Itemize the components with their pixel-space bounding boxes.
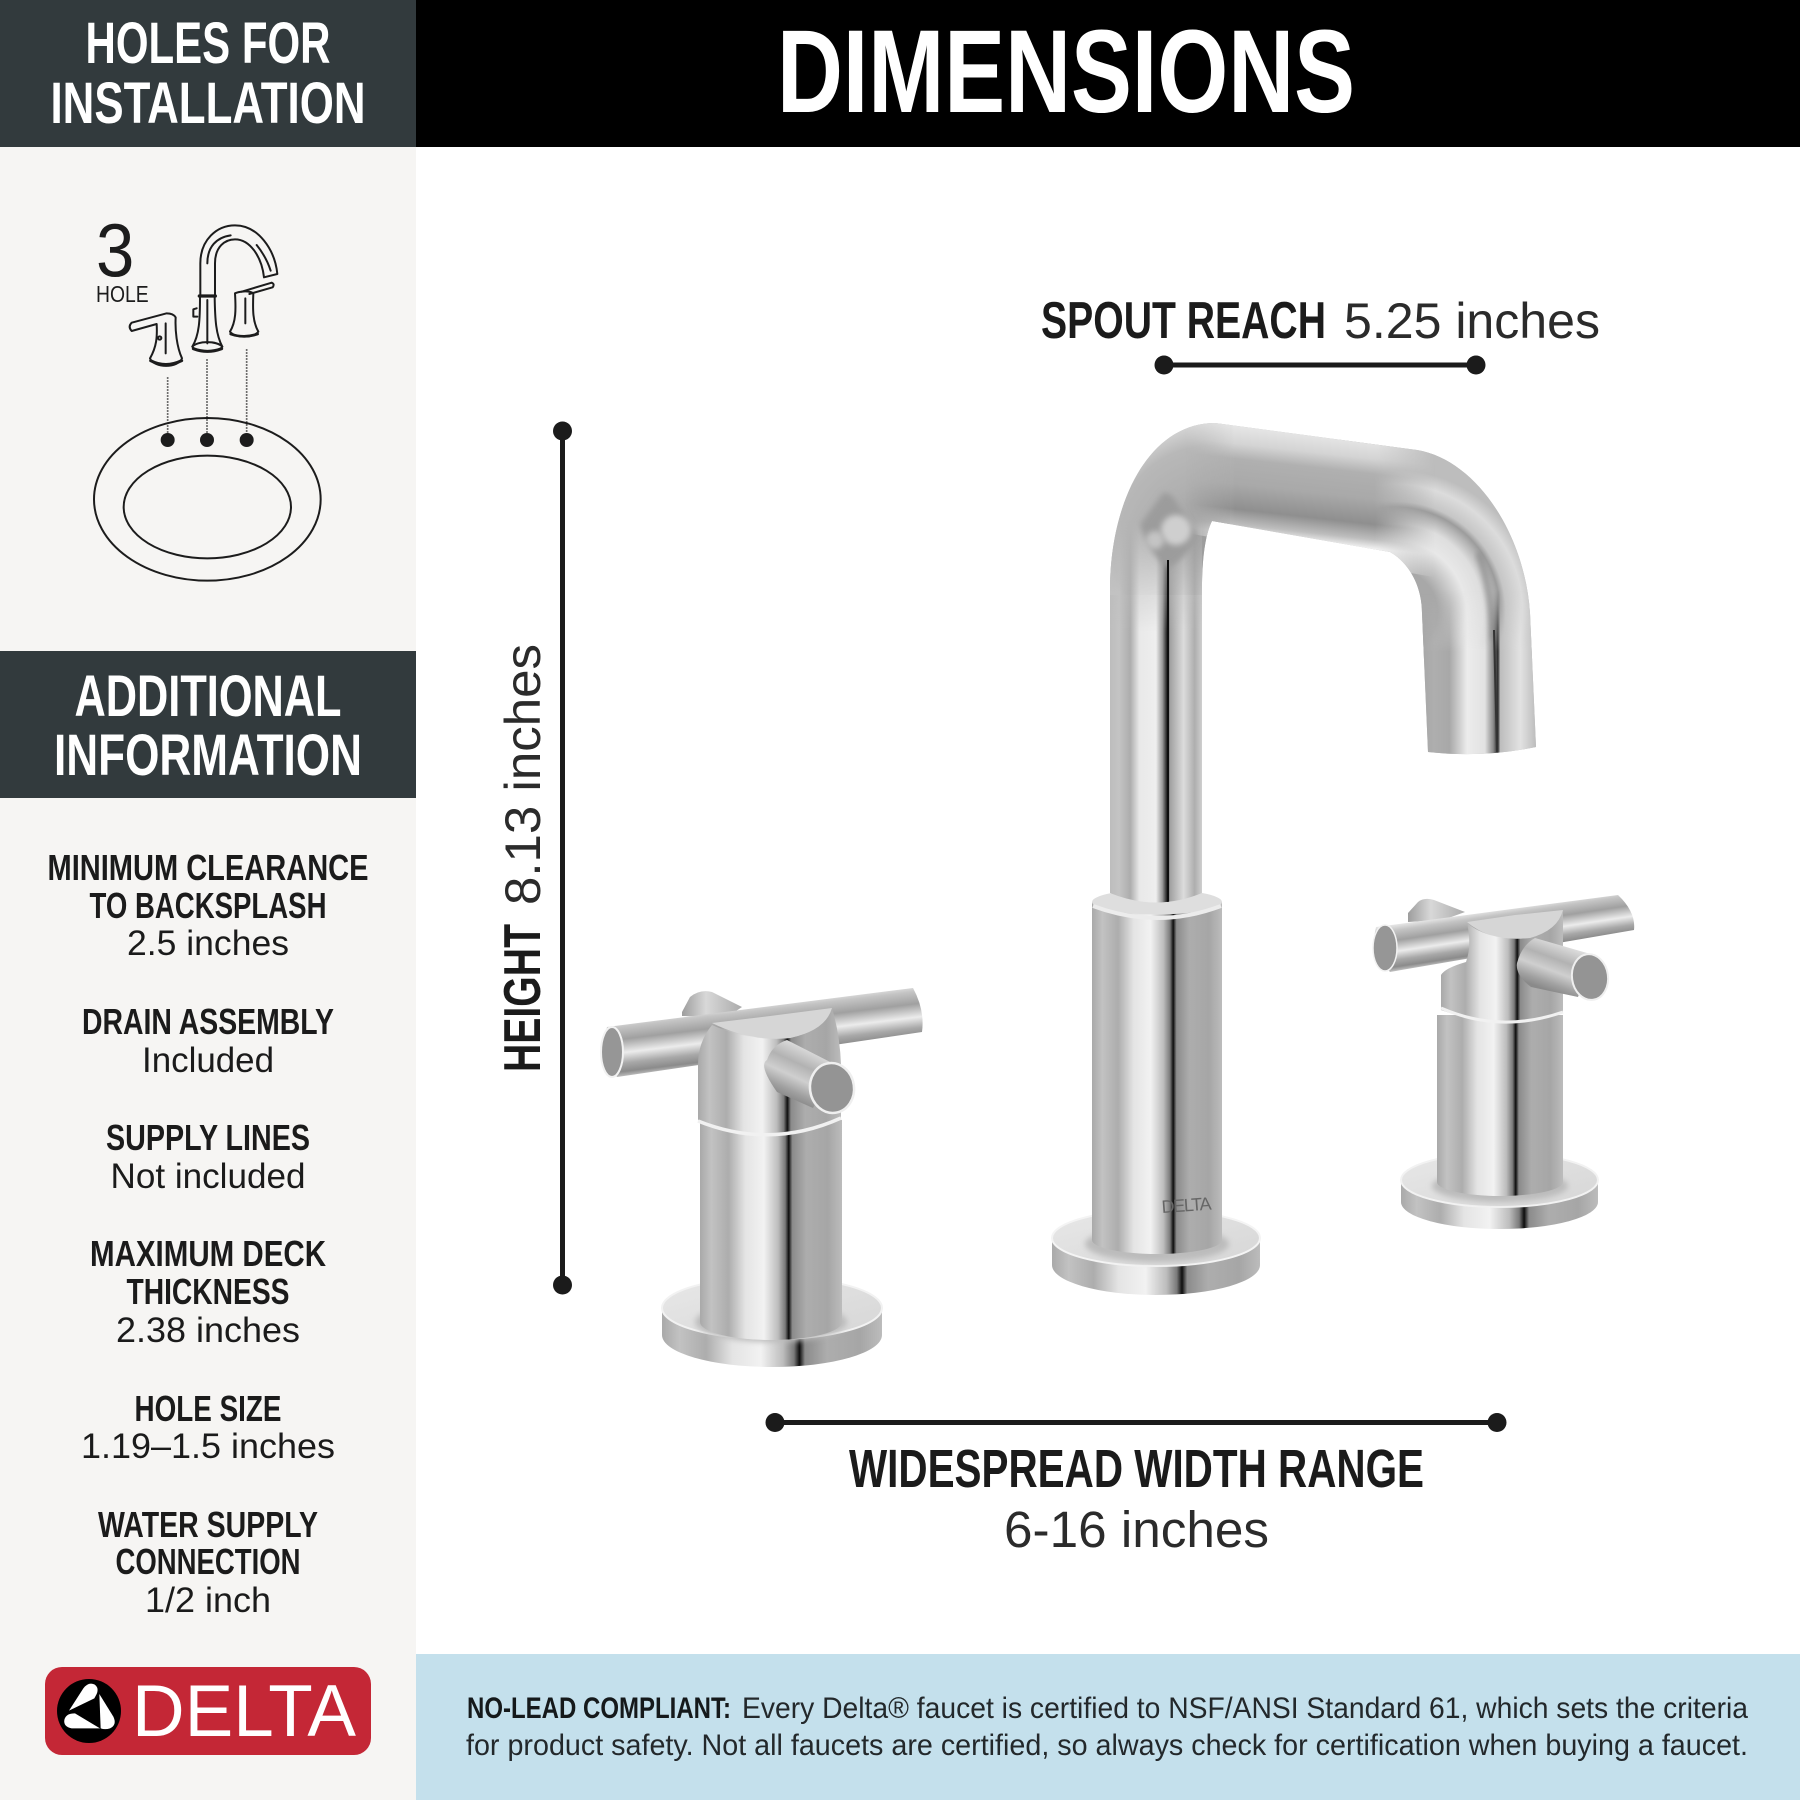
spec: hole size [81,1388,335,1466]
dimension: height: HEIGHT [494,924,552,1072]
spec: maximum deck thickness: MAXIMUM DECK [90,1233,326,1274]
callout: no-lead compliant: for product safety. Not all faucets are certified, so always check for certification when buying a faucet. [466,1729,1748,1762]
spec: maximum deck thickness: 2.38 inches [116,1311,300,1350]
spec: maximum deck thickness: THICKNESS [126,1271,290,1312]
heading band: holes for installation: HOLES FOR [86,11,330,76]
spec: water supply connection [98,1504,318,1620]
spec: water supply connection: WATER SUPPLY [98,1504,318,1545]
engraved brand mark: DELTA [1161,1194,1212,1217]
spec: minimum clearance to backsplash [48,847,368,963]
icon: 3 hole faucet and sink diagram: 3 [96,209,134,293]
spec: minimum clearance to backsplash: TO BACKSPLASH [90,885,326,926]
callout: no-lead compliant [416,1654,1800,1800]
dimension: widespread width range [766,1413,1506,1558]
spec: maximum deck thickness [90,1233,326,1350]
dimension: height [494,422,572,1294]
dimension: widespread width range: 6-16 inches [1004,1501,1269,1558]
spec: hole size: HOLE SIZE [134,1388,282,1429]
heading band: additional information [0,651,416,798]
dimension: widespread width range: WIDESPREAD WIDTH RANGE [849,1439,1424,1499]
spec: water supply connection: 1/2 inch [145,1581,271,1620]
logo: Delta [45,1667,371,1755]
heading band: holes for installation: INSTALLATION [50,71,366,136]
spec: hole size: 1.19–1.5 inches [81,1427,335,1466]
faucet: right cross handle [1373,895,1634,1229]
dimension: spout reach [1041,292,1600,374]
faucet: left cross handle [601,988,923,1367]
spec: drain assembly [82,1001,334,1080]
spec: minimum clearance to backsplash: 2.5 inches [127,924,289,963]
spec: drain assembly: DRAIN ASSEMBLY [82,1001,334,1042]
logo: Delta: DELTA [132,1671,356,1752]
heading band: additional information: INFORMATION [54,723,362,788]
heading band: additional information: ADDITIONAL [74,664,342,729]
heading band: holes for installation [0,0,416,147]
dimension: spout reach: 5.25 inches [1344,293,1600,349]
title band: dimensions [416,0,1800,147]
icon: 3 hole faucet and sink diagram: HOLE [96,281,149,307]
faucet: spout tube [1110,423,1536,902]
spec: supply lines [106,1117,310,1196]
dimension: spout reach: SPOUT REACH [1041,292,1326,350]
spout dimple [1140,493,1197,910]
title band: dimensions: DIMENSIONS [777,6,1355,138]
spec: water supply connection: CONNECTION [116,1541,300,1582]
spec: supply lines: Not included [110,1157,306,1196]
left column panel [0,0,416,1800]
spec: drain assembly: Included [142,1041,274,1080]
faucet: main body cylinder [1052,890,1260,1295]
spec: minimum clearance to backsplash: MINIMUM CLEARANCE [48,847,368,888]
spec: supply lines: SUPPLY LINES [106,1117,310,1158]
dimension: height: 8.13 inches [495,644,551,905]
icon: 3 hole faucet and sink diagram [94,209,321,581]
callout: no-lead compliant: NO-LEAD COMPLIANT: [467,1692,731,1725]
callout: no-lead compliant: Every Delta® faucet is certified to NSF/ANSI Standard 61, which sets the criteria [742,1692,1748,1725]
